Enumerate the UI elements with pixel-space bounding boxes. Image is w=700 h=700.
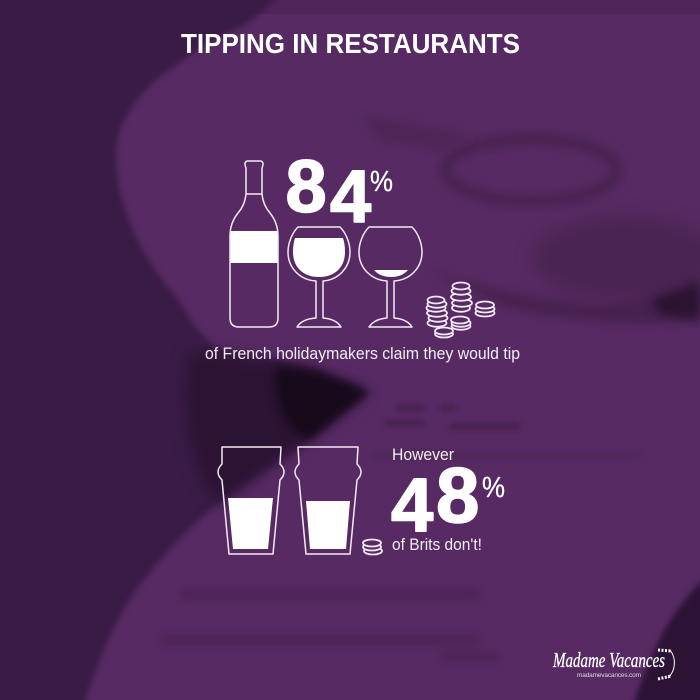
logo: Madame Vacances (552, 648, 674, 679)
caption: Brits: of Brits don't! (392, 535, 482, 554)
icon: wine bottle (230, 161, 278, 327)
statistic: 84 percent: % (370, 166, 393, 198)
icon: stacks of coins (426, 282, 494, 338)
logo: Madame Vacances: madamevacances.com (577, 672, 641, 679)
icon: small coin stack (363, 540, 382, 554)
icon: first pint glass (218, 447, 284, 554)
section: French tipping statistic (205, 145, 520, 363)
icon: nearly empty wine glass (359, 227, 422, 327)
text: However: However (392, 445, 454, 464)
statistic: 84 percent: 4 (330, 155, 371, 238)
section: British tipping statistic (218, 445, 505, 554)
statistic: 84 percent: 8 (286, 145, 327, 228)
statistic: 48 percent: 8 (436, 451, 479, 539)
statistic: 48 percent (391, 451, 505, 548)
title: TIPPING IN RESTAURANTS (181, 28, 520, 59)
icon: nearly full wine glass (288, 227, 350, 327)
statistic: 84 percent (286, 145, 393, 238)
caption: French holidaymakers: of French holidaymakers claim they would tip (205, 344, 520, 363)
statistic: 48 percent: 4 (391, 463, 433, 548)
icon: second pint glass (295, 447, 361, 554)
statistic: 48 percent: % (482, 472, 505, 504)
